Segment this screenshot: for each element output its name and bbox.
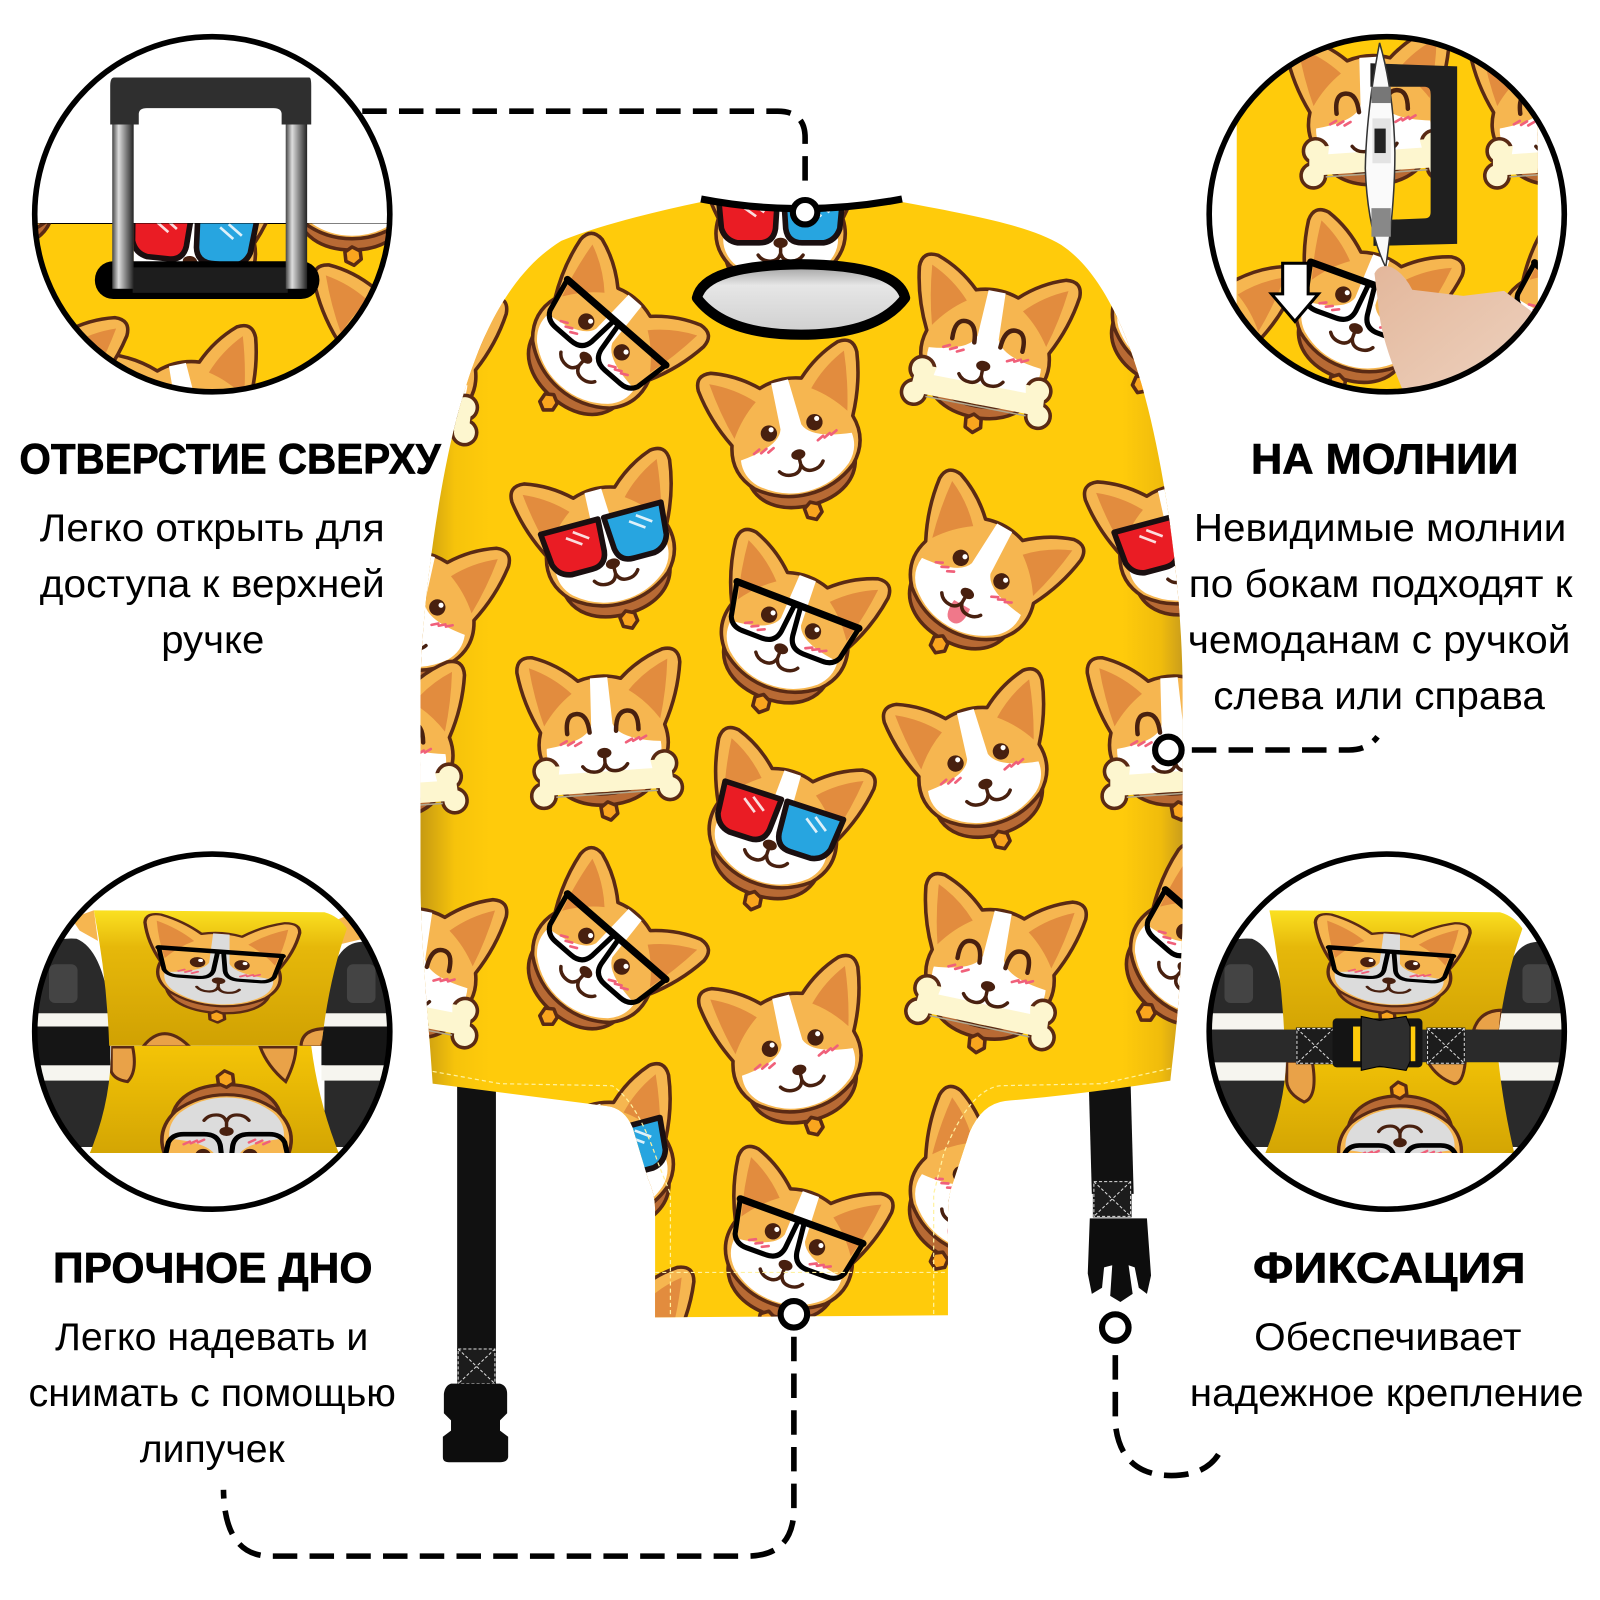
corgi heads	[301, 143, 1311, 1435]
text block: top opening: Легко открыть для	[40, 507, 385, 550]
text block: bottom: Легко надевать и	[55, 1316, 368, 1359]
marker: strap	[1102, 1314, 1129, 1341]
heading: ФИКСАЦИЯ	[1253, 1245, 1526, 1293]
heading: ОТВЕРСТИЕ СВЕРХУ	[19, 435, 442, 483]
heading: ПРОЧНОЕ ДНО	[53, 1245, 372, 1293]
strap	[1204, 1030, 1571, 1062]
buckle	[1333, 1016, 1422, 1070]
connector: top opening	[362, 111, 817, 224]
connector: fixing strap	[1102, 1314, 1221, 1476]
connector: zipper	[1155, 737, 1378, 763]
inset: bottom velcro	[31, 847, 398, 1222]
marker: bottom	[781, 1301, 807, 1328]
heading: НА МОЛНИИ	[1251, 435, 1518, 483]
text block: fixing	[1190, 1245, 1584, 1415]
icon: right buckle	[1088, 1218, 1151, 1302]
text block: zipper	[1188, 435, 1574, 718]
text block: fixing: Обеспечивает	[1254, 1316, 1522, 1359]
lock strip	[1365, 43, 1395, 267]
top opening	[697, 264, 905, 335]
marker: zipper	[1155, 737, 1182, 763]
stitching	[433, 1068, 1170, 1316]
inset: fixing strap buckle	[1204, 847, 1573, 1233]
strap: right	[1088, 1084, 1151, 1302]
text block: zipper: чемоданам с ручкой	[1188, 619, 1570, 662]
text block: bottom	[29, 1245, 396, 1471]
inset: zipper and hand	[1206, 34, 1568, 395]
text block: top opening: доступа к верхней	[40, 563, 385, 606]
text block: fixing: надежное крепление	[1190, 1372, 1584, 1415]
hand	[1374, 266, 1532, 388]
connector: bottom	[223, 1301, 807, 1556]
luggage sides	[1204, 939, 1573, 1147]
strap: left	[443, 1080, 508, 1462]
cover fabric with corgi pattern	[420, 202, 1183, 1318]
luggage sides	[31, 910, 398, 1147]
panel: suitcase cover	[420, 196, 1183, 1462]
text block: zipper: слева или справа	[1213, 675, 1545, 718]
inset: trolley handle	[32, 34, 393, 395]
text block: zipper: Невидимые молнии	[1194, 507, 1566, 550]
marker: top	[793, 200, 817, 224]
text block: zipper: по бокам подходят к	[1189, 563, 1574, 606]
handle	[1370, 63, 1457, 246]
icon: left buckle	[443, 1384, 508, 1462]
collar band	[701, 199, 902, 209]
text block: bottom: липучек	[140, 1428, 286, 1471]
text block: bottom: снимать с помощью	[29, 1372, 396, 1415]
icon: down arrow	[1271, 263, 1318, 321]
text block: top opening: ручке	[161, 619, 264, 662]
text block: top opening	[19, 435, 442, 662]
